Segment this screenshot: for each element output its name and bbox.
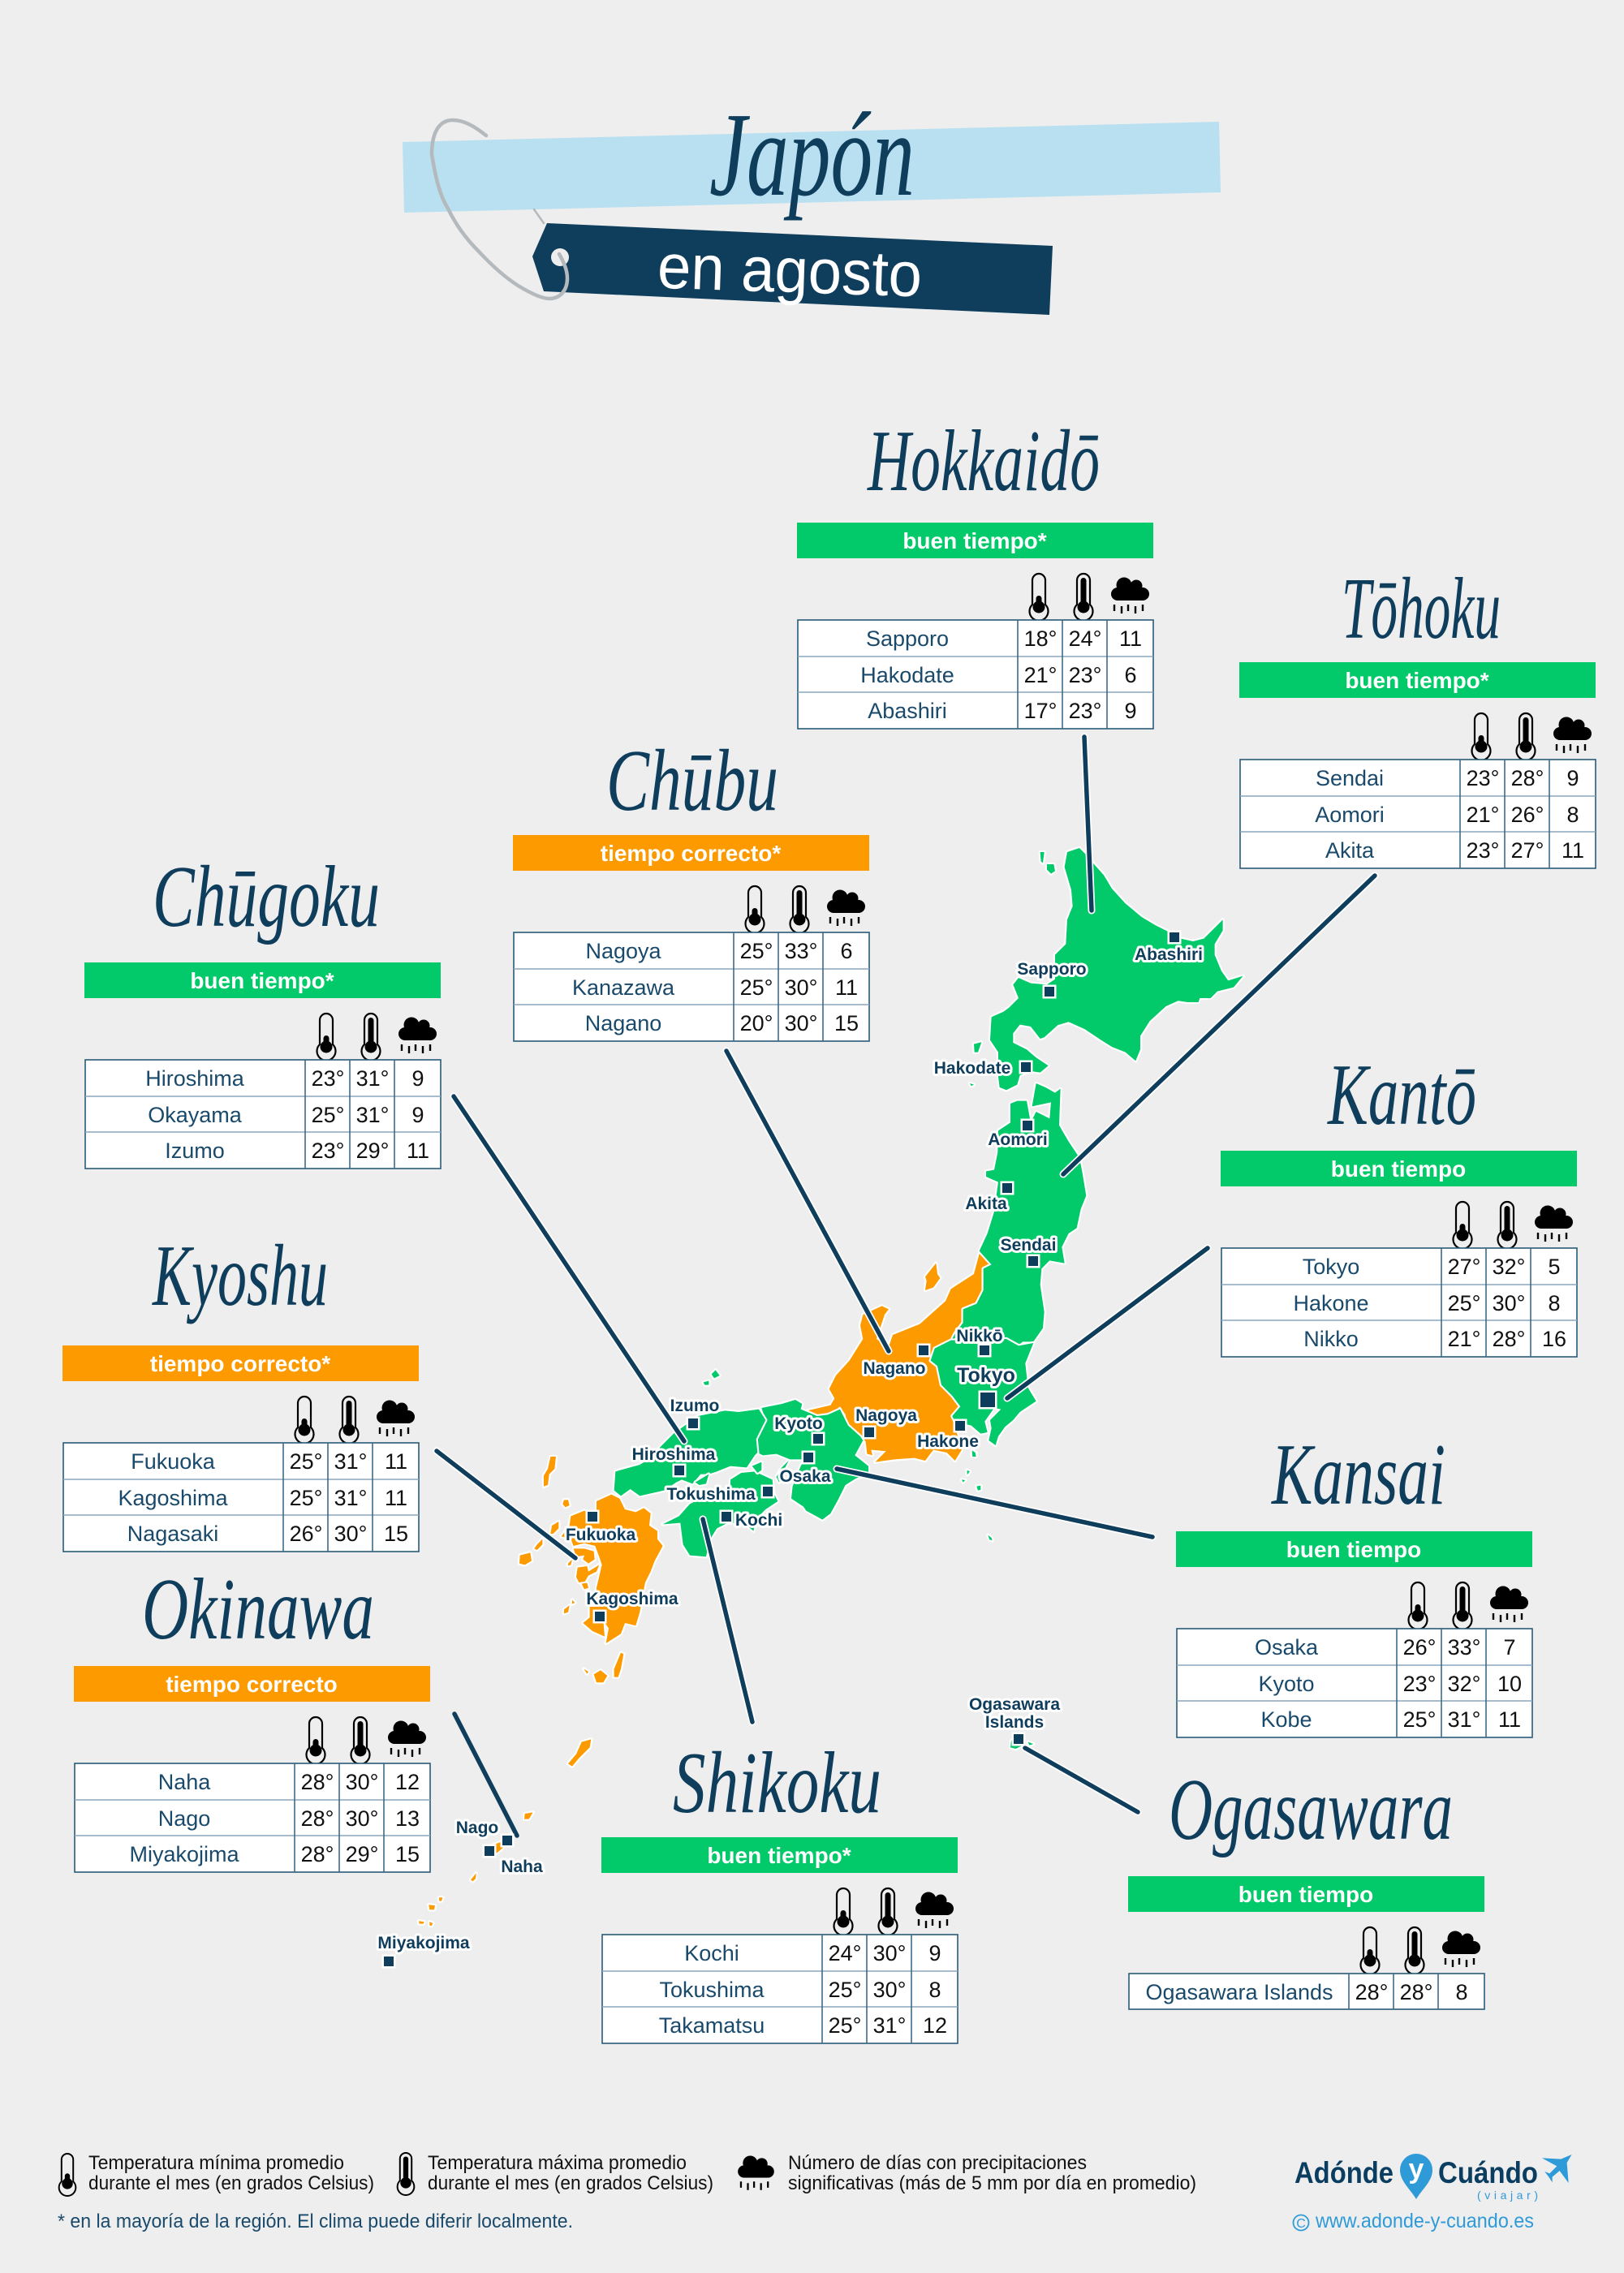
- climate table: 11: [1562, 838, 1584, 863]
- climate table: 11: [385, 1486, 407, 1510]
- city labels: Osaka: [779, 1467, 831, 1486]
- legend item: minimum temperature: [59, 2152, 374, 2196]
- climate table: Aomori: [1315, 803, 1385, 827]
- climate table: 33°: [1448, 1635, 1480, 1660]
- climate table: 31°: [873, 2013, 906, 2038]
- city labels: Akita: [965, 1195, 1007, 1213]
- panel: Hokkaidō: [797, 413, 1153, 729]
- climate table: 11: [1498, 1707, 1521, 1732]
- city labels: Kagoshima: [586, 1590, 678, 1608]
- climate table: 30°: [334, 1522, 367, 1546]
- climate table: 29°: [356, 1139, 389, 1163]
- climate table: 31°: [334, 1449, 367, 1474]
- climate table: 9: [1566, 766, 1579, 790]
- rating bar: [513, 835, 869, 871]
- climate table: 18°: [1024, 626, 1057, 651]
- website: C: [1296, 2217, 1306, 2231]
- climate table: 25°: [290, 1449, 322, 1474]
- climate table: [1221, 1202, 1577, 1357]
- heading: Ogasawara: Ogasawara: [1169, 1762, 1453, 1858]
- climate table: 29°: [346, 1842, 378, 1866]
- rating bar: [797, 523, 1153, 558]
- climate table: 26°: [1511, 803, 1544, 827]
- climate table: Nago: [158, 1806, 210, 1831]
- climate table: Sapporo: [866, 626, 949, 651]
- city labels: Ogasawara: [969, 1695, 1060, 1714]
- climate table: 21°: [1448, 1327, 1480, 1351]
- heading: Chūbu: Chūbu: [606, 733, 778, 829]
- tag string: [432, 120, 567, 299]
- city markers: [384, 932, 1179, 1966]
- climate table: Kagoshima: [118, 1486, 229, 1510]
- climate table: 30°: [346, 1806, 378, 1831]
- legend item: maximum temperature: Temperatura máxima promedio: [428, 2152, 687, 2174]
- map of Japan: [419, 848, 1243, 1926]
- climate table: Izumo: [165, 1139, 225, 1163]
- region: Ogasawara: [1010, 1738, 1033, 1749]
- icon: plane: [1542, 2155, 1572, 2183]
- rating bar: [1239, 662, 1596, 698]
- climate table: 28°: [301, 1806, 334, 1831]
- city labels: [377, 945, 1203, 1952]
- region: Okinawa: [419, 1739, 591, 1926]
- climate table: 30°: [873, 1941, 906, 1965]
- title banner: [403, 88, 1221, 315]
- climate table: 9: [411, 1103, 424, 1127]
- climate table: Okayama: [148, 1103, 243, 1127]
- rating bar: buen tiempo*: [707, 1843, 851, 1868]
- climate table: Abashiri: [868, 699, 947, 723]
- rating bar: tiempo correcto*: [150, 1351, 330, 1376]
- climate table: 13: [395, 1806, 420, 1831]
- icon: location pin: y: [1409, 2154, 1424, 2185]
- climate table: Nagasaki: [127, 1522, 218, 1546]
- arrow: Chūgoku: [454, 1096, 684, 1441]
- region: Hokkaidō: [970, 848, 1243, 1090]
- city labels: Aomori: [988, 1130, 1048, 1149]
- climate table: 9: [1124, 699, 1137, 723]
- climate table: 6: [840, 939, 853, 963]
- rating bar: buen tiempo: [1331, 1156, 1466, 1182]
- rating bar: tiempo correcto*: [601, 841, 781, 866]
- climate table: 30°: [785, 975, 817, 1000]
- climate table: Nagano: [585, 1011, 661, 1035]
- rating bar: [62, 1345, 419, 1381]
- city labels: Kochi: [735, 1511, 782, 1530]
- climate table: 23°: [312, 1139, 344, 1163]
- rating bar: buen tiempo*: [902, 528, 1047, 553]
- climate table: 9: [928, 1941, 941, 1965]
- climate table: Nagoya: [585, 939, 662, 963]
- panel: Kyoshu: [62, 1228, 419, 1552]
- wordmark right: Cuándo: [1438, 2156, 1538, 2189]
- climate table: 28°: [1355, 1980, 1388, 2004]
- connector lines: [437, 737, 1375, 1836]
- climate table: Osaka: [1255, 1635, 1319, 1660]
- climate table: 28°: [1400, 1980, 1432, 2004]
- legend item: maximum temperature: durante el mes (en grados Celsius): [428, 2172, 713, 2194]
- climate table: 25°: [290, 1486, 322, 1510]
- climate table: [1129, 1927, 1484, 2009]
- climate table: Tokyo: [1303, 1255, 1359, 1279]
- climate table: Kanazawa: [572, 975, 675, 1000]
- arrow: Hokkaidō: [1084, 737, 1092, 910]
- panel: Tōhoku: [1239, 561, 1596, 868]
- website: www.adonde-y-cuando.es: [1315, 2210, 1534, 2232]
- climate table: 24°: [1069, 626, 1101, 651]
- climate table: Fukuoka: [131, 1449, 216, 1474]
- climate table: Tokushima: [659, 1978, 765, 2002]
- climate table: 25°: [740, 939, 773, 963]
- city labels: Nagano: [863, 1359, 926, 1378]
- climate table: 12: [395, 1770, 420, 1794]
- climate table: 11: [385, 1449, 407, 1474]
- city labels: Izumo: [670, 1397, 719, 1415]
- climate table: 11: [1119, 626, 1142, 651]
- city labels: Hakodate: [934, 1059, 1010, 1078]
- rating bar: tiempo correcto: [166, 1672, 338, 1697]
- city labels: Nagoya: [855, 1406, 917, 1425]
- climate table: 8: [1566, 803, 1579, 827]
- city labels: Tokushima: [666, 1485, 756, 1504]
- panel: Kantō: [1221, 1047, 1577, 1357]
- legend item: rainy days: [738, 2152, 1196, 2194]
- climate table: 31°: [356, 1066, 389, 1091]
- heading: Kyoshu: Kyoshu: [152, 1228, 328, 1324]
- panel: Kansai: [1176, 1427, 1532, 1737]
- luggage tag: [532, 223, 1053, 315]
- climate table: 28°: [1511, 766, 1544, 790]
- climate table: 30°: [873, 1978, 906, 2002]
- arrow: Shikoku: [703, 1519, 752, 1722]
- climate table: 27°: [1448, 1255, 1480, 1279]
- climate table: 28°: [1493, 1327, 1525, 1351]
- climate table: 23°: [1069, 699, 1101, 723]
- climate table: Ogasawara Islands: [1145, 1980, 1333, 2004]
- rating bar: buen tiempo*: [1345, 668, 1489, 693]
- climate table: 33°: [785, 939, 817, 963]
- legend: [59, 2152, 1196, 2196]
- climate table: 11: [407, 1139, 429, 1163]
- panel: Okinawa: [74, 1561, 430, 1872]
- climate table: 21°: [1024, 663, 1057, 687]
- climate table: Hakone: [1293, 1291, 1369, 1315]
- climate table: Sendai: [1316, 766, 1384, 790]
- light blue band: [403, 122, 1221, 213]
- rating bar: [1176, 1531, 1532, 1567]
- climate table: 21°: [1467, 803, 1499, 827]
- city labels: Nikkō: [956, 1327, 1003, 1345]
- city labels: Sendai: [1001, 1236, 1056, 1255]
- climate table: 30°: [1493, 1291, 1525, 1315]
- rating bar: [84, 962, 441, 998]
- logo: Adónde y Cuándo: [1294, 2154, 1572, 2232]
- city labels: Nago: [456, 1819, 498, 1837]
- climate table: [798, 574, 1153, 729]
- city labels: Abashiri: [1135, 945, 1203, 964]
- climate table: 31°: [1448, 1707, 1480, 1732]
- climate table: [75, 1717, 430, 1872]
- climate table: 31°: [356, 1103, 389, 1127]
- climate table: 8: [1548, 1291, 1561, 1315]
- arrow: Tōhoku: [1063, 876, 1375, 1174]
- climate table: [1240, 713, 1596, 868]
- climate table: 15: [395, 1842, 420, 1866]
- climate table: 32°: [1448, 1672, 1480, 1696]
- region: Kyūshū: [519, 1457, 663, 1682]
- arrow: Kantō: [1007, 1248, 1208, 1398]
- climate table: 25°: [740, 975, 773, 1000]
- arrow: Ogasawara: [1025, 1748, 1138, 1812]
- panel: Chūgoku: [84, 849, 441, 1169]
- climate table: Kochi: [684, 1941, 739, 1965]
- region: Kansai: [756, 1400, 993, 1540]
- climate table: 16: [1542, 1327, 1566, 1351]
- city labels: Hiroshima: [632, 1445, 716, 1464]
- rating bar: buen tiempo: [1238, 1882, 1373, 1907]
- region: Shikoku: [663, 1462, 778, 1556]
- climate table: 5: [1548, 1255, 1561, 1279]
- climate table: 25°: [829, 1978, 861, 2002]
- heading: Tōhoku: Tōhoku: [1342, 561, 1501, 657]
- climate table: 7: [1503, 1635, 1516, 1660]
- climate table: [1177, 1582, 1532, 1737]
- climate table: Kobe: [1260, 1707, 1312, 1732]
- climate table: [602, 1888, 958, 2043]
- climate table: 10: [1497, 1672, 1522, 1696]
- city labels: Tokyo: [957, 1364, 1015, 1387]
- climate table: Kyoto: [1258, 1672, 1315, 1696]
- rating bar: buen tiempo: [1286, 1537, 1421, 1562]
- climate table: 30°: [785, 1011, 817, 1035]
- legend item: rainy days: Número de días con precipitaciones: [788, 2152, 1087, 2174]
- city labels: Naha: [501, 1858, 543, 1876]
- climate table: 32°: [1493, 1255, 1525, 1279]
- climate table: 25°: [829, 2013, 861, 2038]
- climate table: Hiroshima: [145, 1066, 245, 1091]
- heading: Shikoku: Shikoku: [673, 1735, 881, 1832]
- rating bar: [601, 1837, 958, 1873]
- climate table: 26°: [290, 1522, 322, 1546]
- climate table: 23°: [1467, 838, 1499, 863]
- panel: Chūbu: [513, 733, 869, 1041]
- climate table: Hakodate: [860, 663, 954, 687]
- rating bar: buen tiempo*: [190, 968, 334, 993]
- legend item: minimum temperature: Temperatura mínima promedio: [88, 2152, 344, 2174]
- tagline: (viajar): [1477, 2189, 1538, 2202]
- region: Kantō: [931, 1339, 1036, 1457]
- climate table: 23°: [1403, 1672, 1436, 1696]
- climate table: 30°: [346, 1770, 378, 1794]
- region: Chūbu: [808, 1254, 992, 1462]
- climate table: [63, 1397, 419, 1552]
- climate table: 17°: [1024, 699, 1057, 723]
- legend item: rainy days: significativas (más de 5 mm por día en promedio): [788, 2172, 1196, 2194]
- climate table: 31°: [334, 1486, 367, 1510]
- panel: Shikoku: [601, 1735, 958, 2043]
- climate table: 24°: [829, 1941, 861, 1965]
- city labels: Sapporo: [1017, 960, 1087, 979]
- arrow: Okinawa: [454, 1714, 517, 1836]
- climate table: 6: [1124, 663, 1137, 687]
- climate table: 11: [835, 975, 858, 1000]
- climate table: 8: [928, 1978, 941, 2002]
- climate table: 28°: [301, 1770, 334, 1794]
- legend item: minimum temperature: durante el mes (en grados Celsius): [88, 2172, 374, 2194]
- climate table: 28°: [301, 1842, 334, 1866]
- climate table: 20°: [740, 1011, 773, 1035]
- climate table: 8: [1455, 1980, 1468, 2004]
- arrow: Chūbu: [726, 1051, 889, 1351]
- heading: Kantō: Kantō: [1327, 1047, 1476, 1143]
- climate table: 23°: [1069, 663, 1101, 687]
- rating bar: [1221, 1151, 1577, 1186]
- region: Chūgoku: [614, 1370, 765, 1496]
- arrow: Kyushu: [437, 1451, 575, 1558]
- heading: Hokkaidō: Hokkaidō: [867, 413, 1100, 510]
- rating bar: [74, 1666, 430, 1702]
- climate table: Naha: [158, 1770, 211, 1794]
- climate table: 25°: [1403, 1707, 1436, 1732]
- legend item: maximum temperature: [398, 2152, 713, 2195]
- climate table: Nikko: [1303, 1327, 1359, 1351]
- icon: location pin: [1400, 2154, 1432, 2199]
- climate table: Takamatsu: [659, 2013, 765, 2038]
- climate table: Miyakojima: [129, 1842, 239, 1866]
- climate table: [514, 886, 869, 1041]
- climate table: Akita: [1325, 838, 1375, 863]
- climate table: [85, 1014, 441, 1169]
- panel: Ogasawara: [1128, 1762, 1484, 2009]
- climate table: 25°: [312, 1103, 344, 1127]
- region: Tōhoku: [952, 1083, 1086, 1345]
- climate table: 26°: [1403, 1635, 1436, 1660]
- climate table: 23°: [1467, 766, 1499, 790]
- heading: Okinawa: Okinawa: [142, 1561, 374, 1658]
- climate table: 25°: [1448, 1291, 1480, 1315]
- heading: Chūgoku: Chūgoku: [153, 849, 380, 945]
- rating bar: [1128, 1876, 1484, 1912]
- wordmark left: Adónde: [1294, 2156, 1394, 2189]
- footnote: * en la mayoría de la región. El clima puede diferir localmente.: [58, 2211, 573, 2232]
- heading: Kansai: Kansai: [1271, 1427, 1445, 1523]
- climate table: 27°: [1511, 838, 1544, 863]
- climate table: 23°: [312, 1066, 344, 1091]
- title: Japón: Japón: [709, 88, 915, 222]
- arrow: Kansai: [837, 1469, 1152, 1537]
- subtitle: en agosto: en agosto: [657, 230, 924, 310]
- city labels: Miyakojima: [377, 1934, 470, 1952]
- city labels: Kyoto: [774, 1414, 823, 1433]
- city labels: Fukuoka: [566, 1526, 635, 1544]
- climate table: 15: [384, 1522, 408, 1546]
- climate table: 9: [411, 1066, 424, 1091]
- city labels: Hakone: [917, 1432, 979, 1451]
- city labels: Islands: [985, 1713, 1044, 1732]
- climate table: 15: [834, 1011, 859, 1035]
- climate table: 12: [923, 2013, 947, 2038]
